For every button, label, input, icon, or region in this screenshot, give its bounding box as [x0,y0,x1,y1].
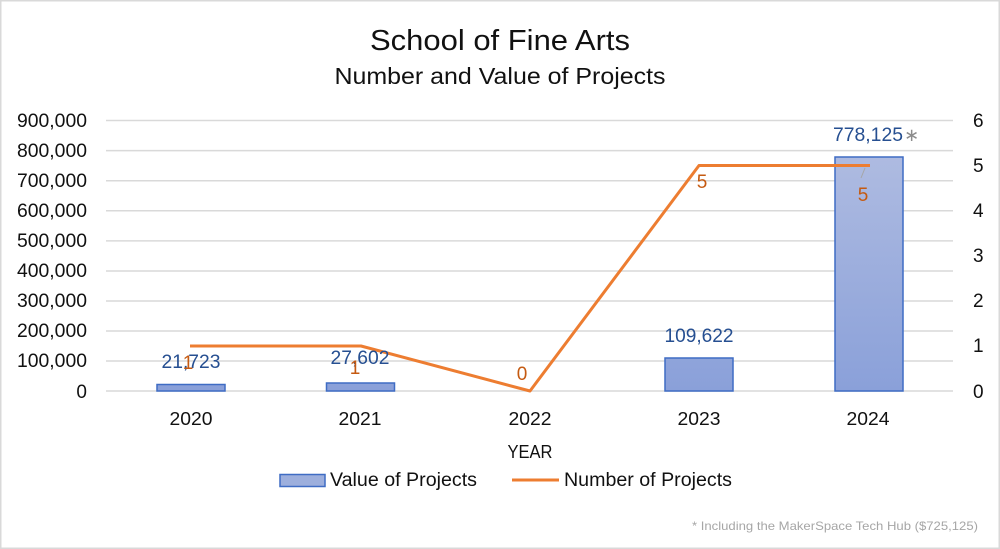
left axis labels: 900,000 [17,111,87,132]
category labels: 2022 [508,409,552,429]
left axis labels: 800,000 [17,141,87,162]
left axis labels: 700,000 [17,171,87,192]
value data labels [162,125,903,373]
legend label: value: Value of Projects [330,470,477,491]
legend [280,470,732,491]
leader line [861,168,865,178]
left axis labels: 500,000 [17,231,87,252]
category labels: 2024 [846,409,890,429]
left axis labels: 300,000 [17,291,87,312]
right axis labels: 1 [973,336,984,357]
category labels: 2020 [170,409,212,429]
right axis labels: 2 [973,291,984,312]
subtitle: Number and Value of Projects [334,63,666,89]
right axis labels: 0 [973,382,984,403]
right axis labels: 5 [973,156,984,177]
number data labels: 1 [350,358,360,379]
value data labels: 778,125 [833,125,903,146]
left axis labels [17,111,87,403]
footnote: * Including the MakerSpace Tech Hub ($725,125) [692,519,978,533]
left axis labels: 400,000 [17,261,87,282]
legend swatch: value [280,474,325,486]
title: School of Fine Arts [370,25,630,57]
number data labels: 1 [183,353,193,374]
right axis labels [973,111,984,403]
right axis labels: 4 [973,201,984,222]
value data labels: 109,622 [664,326,734,347]
left axis labels: 0 [76,382,87,403]
category labels [170,409,890,429]
number data labels [183,172,868,385]
value data labels: 21,723 [162,352,220,373]
number data labels: 0 [517,364,527,385]
line: number of projects [190,166,870,391]
asterisk: ∗ [904,125,919,146]
right axis labels: 3 [973,246,984,267]
left axis labels: 200,000 [17,321,87,342]
category labels: 2021 [338,409,382,429]
number data labels: 5 [697,172,707,193]
legend swatch: number [512,478,559,482]
right axis labels: 6 [973,111,984,132]
left axis labels: 100,000 [17,351,87,372]
x axis title: YEAR [508,442,552,462]
category labels: 2023 [678,409,720,429]
bars: value of projects [157,157,903,391]
legend label: number: Number of Projects [564,470,732,491]
value data labels: 27,602 [330,348,390,369]
left axis labels: 600,000 [17,201,87,222]
number data labels: 5 [858,185,868,206]
